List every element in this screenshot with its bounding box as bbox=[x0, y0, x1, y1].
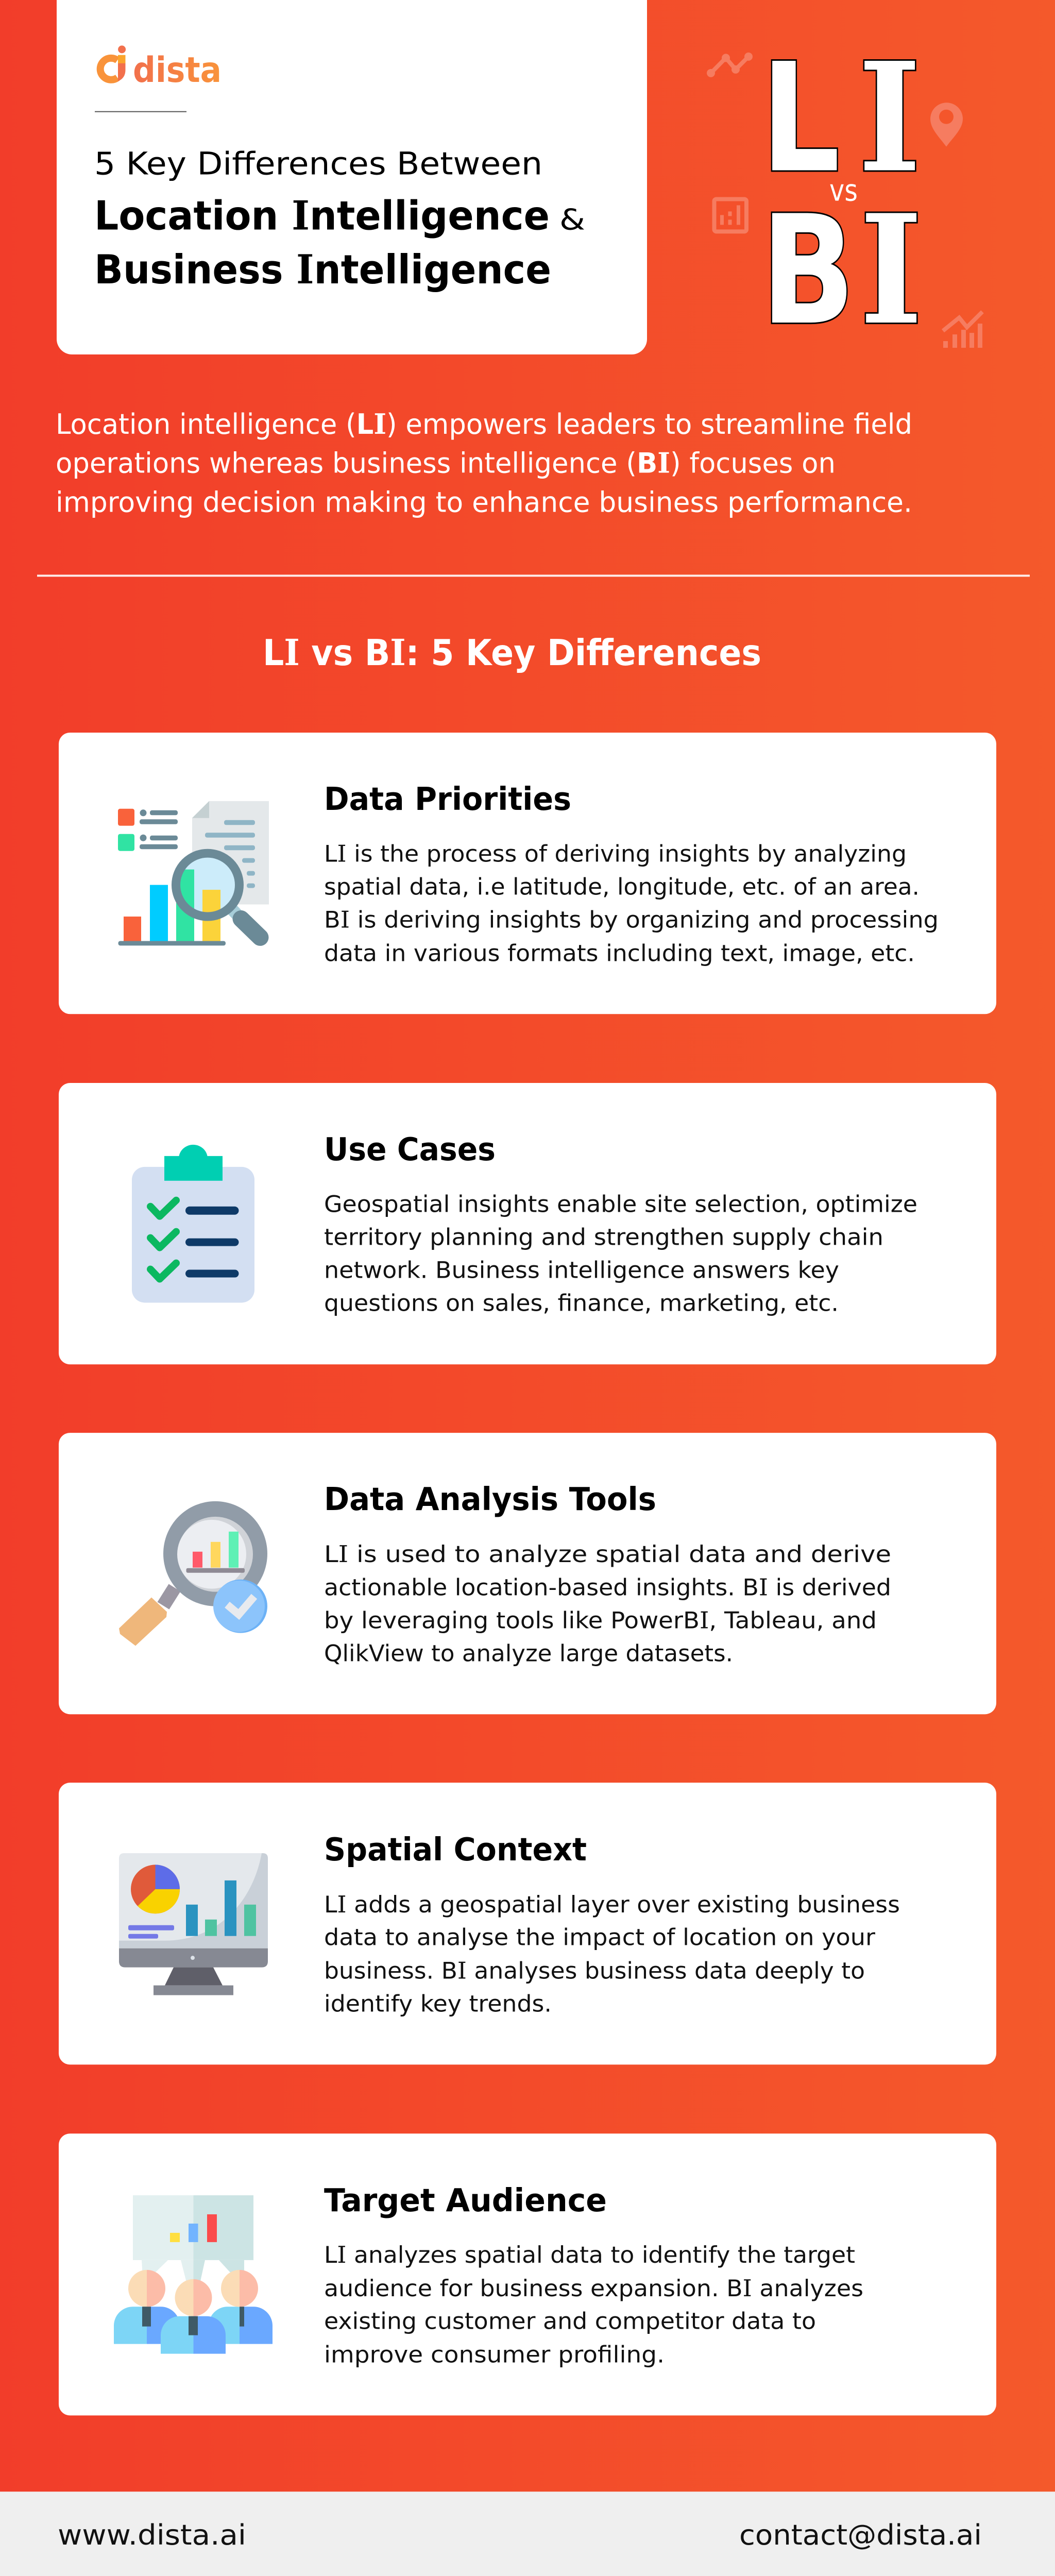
panel: Target Audience bbox=[59, 2133, 996, 2415]
body text: data to analyse the impact of location on your bbox=[324, 1924, 876, 1951]
icon: map pin bbox=[930, 103, 963, 147]
icon: bar box bbox=[714, 199, 746, 231]
body text: spatial data, i.e latitude, longitude, etc. of an area. bbox=[324, 873, 920, 901]
title bbox=[94, 146, 585, 293]
big letters BI: B bbox=[761, 183, 855, 358]
intro text: improving decision making to enhance business performance. bbox=[56, 486, 912, 519]
body text: LI adds a geospatial layer over existing business bbox=[324, 1891, 900, 1918]
website: www.dista.ai bbox=[58, 2519, 246, 2551]
body text bbox=[324, 1891, 900, 2018]
intro text: operations whereas business intelligence (BI) focuses on bbox=[56, 447, 836, 480]
email: contact@dista.ai bbox=[739, 2519, 982, 2551]
heading: Data Priorities bbox=[324, 780, 571, 818]
body text: Geospatial insights enable site selection, optimize bbox=[324, 1191, 917, 1218]
heading: Data Analysis Tools bbox=[324, 1480, 656, 1518]
title: & bbox=[559, 203, 585, 236]
body text bbox=[324, 2241, 863, 2368]
title: 5 Key Differences Between bbox=[94, 146, 542, 182]
body text: LI analyzes spatial data to identify the target bbox=[324, 2241, 855, 2268]
intro text bbox=[56, 408, 912, 519]
body text: identify key trends. bbox=[324, 1990, 552, 2018]
panel: Data Priorities bbox=[59, 733, 996, 1014]
panel: Use Cases bbox=[59, 1083, 996, 1364]
panel: header card bbox=[57, 0, 647, 354]
icon: magnifier with chart bbox=[119, 1501, 267, 1646]
body text: business. BI analyses business data deeply to bbox=[324, 1957, 865, 1985]
body text bbox=[324, 1540, 891, 1667]
body text: existing customer and competitor data to bbox=[324, 2308, 816, 2335]
vs label: vs bbox=[829, 173, 858, 208]
title: Location Intelligence bbox=[94, 192, 550, 239]
big letters LI bbox=[761, 29, 921, 206]
body text: data in various formats including text, image, etc. bbox=[324, 939, 915, 967]
icon: line chart bbox=[707, 53, 753, 77]
body text: BI is deriving insights by organizing and processing bbox=[324, 906, 939, 933]
big letters LI: I bbox=[858, 29, 921, 206]
icon: report with magnifier bbox=[118, 801, 269, 945]
heading: Target Audience bbox=[324, 2181, 607, 2219]
heading: Spatial Context bbox=[324, 1831, 587, 1868]
body text bbox=[324, 1191, 917, 1316]
body text: LI is the process of deriving insights by analyzing bbox=[324, 840, 907, 868]
icon: audience with chart bubble bbox=[114, 2195, 273, 2354]
big letters BI: I bbox=[860, 181, 923, 358]
logo: dista bbox=[100, 45, 222, 91]
body text: questions on sales, finance, marketing, etc. bbox=[324, 1289, 839, 1316]
title: Business Intelligence bbox=[94, 246, 551, 293]
intro text: Location intelligence (LI) empowers leaders to streamline field bbox=[56, 408, 912, 440]
big letters LI: L bbox=[761, 31, 840, 206]
body text: audience for business expansion. B I analyzes bbox=[324, 2275, 863, 2302]
heading: Use Cases bbox=[324, 1130, 496, 1168]
body text: territory planning and strengthen supply chain bbox=[324, 1224, 883, 1251]
body text: improve consumer profiling. bbox=[324, 2341, 665, 2368]
icon: monitor dashboard bbox=[119, 1853, 268, 1995]
panel: Spatial Context bbox=[59, 1783, 996, 2064]
body text: QlikView to analyze large datasets. bbox=[324, 1640, 733, 1667]
logo: dista: dista bbox=[133, 50, 222, 91]
LI vs BI graphic bbox=[707, 29, 982, 358]
footer bbox=[0, 2492, 1055, 2576]
body text bbox=[324, 840, 939, 967]
body text: by leveraging tools like PowerB I, Tableau, and bbox=[324, 1607, 877, 1634]
body text: network. Business intelligence answers key bbox=[324, 1257, 839, 1284]
body text: actionable location-based insights. B I is derived bbox=[324, 1574, 891, 1601]
icon: clipboard checklist bbox=[132, 1145, 254, 1302]
section heading: LI vs BI: 5 Key Differences bbox=[263, 632, 761, 674]
panel: Data Analysis Tools bbox=[59, 1433, 996, 1714]
body text: LI is used to analyze spatial data and derive bbox=[324, 1540, 891, 1568]
icon: trend bars bbox=[943, 312, 982, 348]
